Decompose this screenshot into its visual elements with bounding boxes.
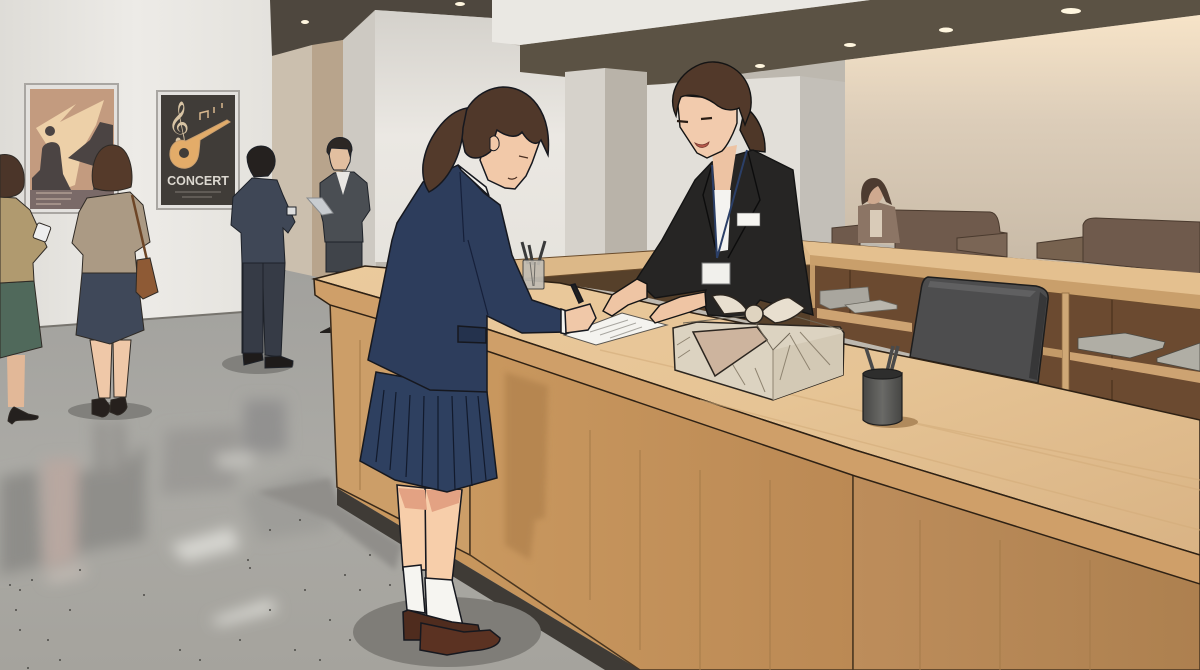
background person: woman with shoulder bag <box>68 145 158 420</box>
background man in navy suit <box>222 146 296 374</box>
staff hair <box>673 62 751 125</box>
staff member in black suit <box>603 62 813 323</box>
ear <box>490 136 499 151</box>
poster: concert <box>157 91 239 209</box>
shadow <box>353 597 541 667</box>
staff lanyard <box>712 150 747 258</box>
background man with clipboard <box>307 137 370 333</box>
face <box>480 130 542 189</box>
hair <box>462 87 548 158</box>
legs <box>397 485 462 582</box>
poster: concert: CONCERT <box>167 174 229 188</box>
poster: piano performer <box>25 84 118 213</box>
socks <box>403 565 464 630</box>
office chair <box>910 277 1048 383</box>
background person: woman in tan jacket with phone <box>0 155 51 424</box>
pencil cup on far counter <box>522 241 545 289</box>
poster: concert: 𝄞 <box>168 101 189 144</box>
lounge sofas with seated person <box>832 178 1200 274</box>
paper form on counter <box>564 313 667 345</box>
jacket <box>368 165 566 392</box>
back counter with shelves <box>510 241 1200 420</box>
staff ponytail <box>740 107 765 152</box>
furoshiki wrapped package <box>673 295 844 400</box>
cuff <box>561 309 567 334</box>
staff badge <box>702 263 730 284</box>
shoes <box>403 610 480 640</box>
polished concrete floor <box>0 270 605 670</box>
staff jacket <box>636 150 813 318</box>
skirt <box>360 372 497 492</box>
student in school uniform <box>353 87 596 667</box>
staff face <box>677 95 737 158</box>
pen cup on near counter <box>863 346 918 428</box>
staff name tag <box>737 213 760 226</box>
hand and pen <box>565 304 596 333</box>
ponytail <box>423 108 467 192</box>
main counter <box>314 266 1200 670</box>
staff hands <box>603 279 647 316</box>
staff neck <box>712 145 737 190</box>
